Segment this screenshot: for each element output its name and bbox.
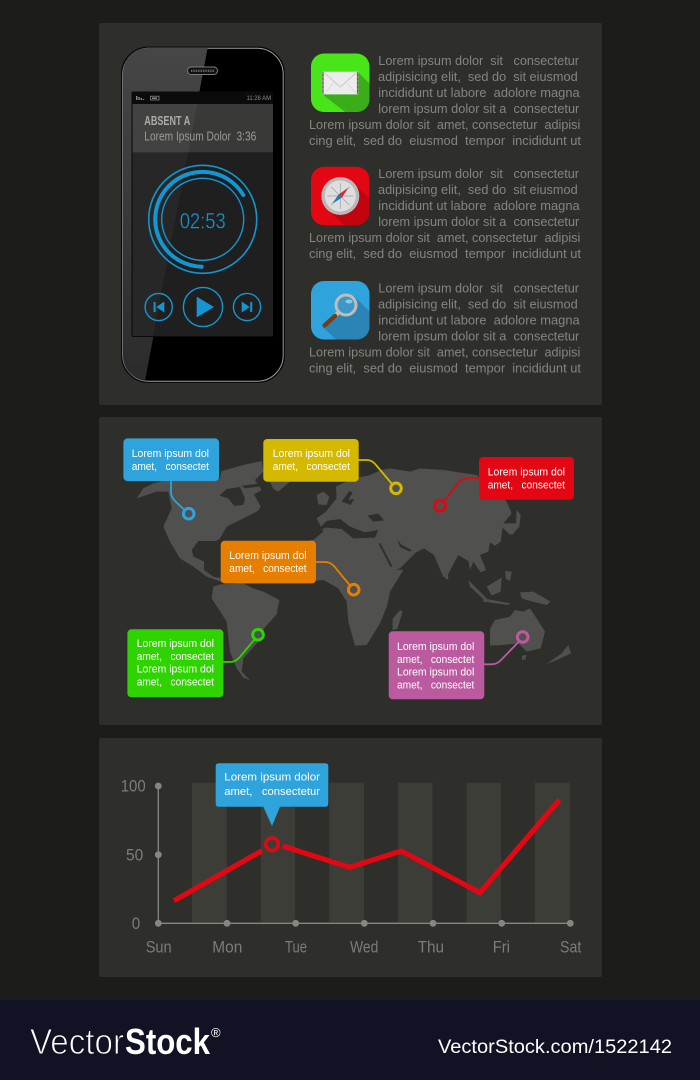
- text block: compass: cing elit, sed do eiusmod tempor incididunt ut: [309, 247, 582, 261]
- phone screen: [132, 92, 273, 337]
- callout: yellow marker: amet, consectet: [273, 461, 350, 473]
- callout: green marker: Lorem ipsum dol: [137, 638, 214, 650]
- image id url: VectorStock.com/1522142: [438, 1036, 672, 1058]
- chart axes: [155, 783, 574, 927]
- track header: [133, 104, 273, 152]
- text block: mail: Lorem ipsum dolor sit consectetur: [378, 54, 579, 68]
- text block: search: [309, 281, 582, 375]
- text block: search: Lorem ipsum dolor sit amet, consectetur adipisi: [309, 345, 580, 359]
- timer dial: [149, 165, 257, 273]
- callout: red marker: amet, consectet: [488, 480, 565, 492]
- VectorStock logo: ®: [211, 1025, 221, 1040]
- track header: Lorem Ipsum Dolor 3:36: [144, 130, 256, 144]
- callout: purple marker: amet, consectet: [397, 654, 474, 666]
- callout: orange marker: [221, 541, 359, 595]
- callout: green marker: amet, consectet: [137, 676, 214, 688]
- VectorStock logo: Stock: [125, 1021, 211, 1062]
- x axis day labels: Fri: [493, 939, 510, 957]
- text block: compass: incididunt ut labore adolore magna: [378, 199, 580, 213]
- red data line: [174, 800, 559, 901]
- chart background bars: [192, 783, 570, 922]
- text block: compass: adipisicing elit, sed do sit eiusmod: [378, 183, 578, 197]
- callout: green marker: Lorem ipsum dol: [137, 664, 214, 676]
- text block: compass: Lorem ipsum dolor sit amet, consectetur adipisi: [309, 231, 580, 245]
- text block: search: incididunt ut labore adolore magna: [378, 313, 580, 327]
- x axis day labels: Wed: [350, 939, 378, 957]
- x axis day labels: Mon: [212, 939, 242, 957]
- watermark footer band: [0, 1000, 700, 1080]
- text block: search: lorem ipsum dolor sit a consectetur: [378, 329, 579, 343]
- status bar: 11:28 AM: [246, 95, 271, 102]
- x axis day labels: Sat: [560, 939, 582, 957]
- callout: green marker: [127, 629, 263, 697]
- x axis day labels: Thu: [418, 939, 444, 957]
- text block: mail: cing elit, sed do eiusmod tempor incididunt ut: [309, 134, 582, 148]
- y axis labels: 50: [126, 845, 143, 864]
- chart tooltip: Lorem ipsum dolor: [224, 772, 320, 784]
- callout: orange marker: Lorem ipsum dol: [229, 550, 307, 562]
- callout: red marker: Lorem ipsum dol: [488, 466, 565, 478]
- status bar: [136, 95, 271, 102]
- phone mockup: [120, 46, 284, 382]
- callout: yellow marker: Lorem ipsum dol: [273, 448, 350, 460]
- callout: orange marker: amet, consectet: [229, 563, 307, 575]
- icon: play button: [183, 287, 223, 327]
- chart tooltip: [216, 763, 328, 826]
- callout: blue marker: [123, 438, 219, 519]
- callout: purple marker: [389, 631, 528, 699]
- text block: mail: [309, 54, 582, 148]
- americas and greenland: [137, 461, 290, 680]
- chart tooltip: amet, consectetur: [224, 786, 320, 798]
- text block: mail: incididunt ut labore adolore magna: [378, 86, 580, 100]
- icon: phone speaker: [188, 67, 218, 74]
- callout: purple marker: Lorem ipsum dol: [397, 641, 474, 653]
- icon: green mail app: [311, 54, 370, 112]
- text block: compass: lorem ipsum dolor sit a consectetur: [378, 215, 579, 229]
- callout: yellow marker: [263, 439, 401, 494]
- callout: purple marker: amet, consectet: [397, 680, 474, 692]
- x axis day labels: [146, 939, 582, 957]
- x axis day labels: Tue: [285, 939, 307, 957]
- y axis labels: [121, 777, 146, 933]
- text block: mail: Lorem ipsum dolor sit amet, consectetur adipisi: [309, 118, 580, 132]
- text block: mail: lorem ipsum dolor sit a consectetur: [378, 102, 579, 116]
- text block: search: Lorem ipsum dolor sit consectetur: [378, 281, 579, 295]
- callout: green marker: amet, consectet: [137, 651, 214, 663]
- callout: blue marker: amet, consectet: [132, 461, 209, 473]
- text block: compass: [309, 167, 582, 261]
- x axis day labels: Sun: [146, 939, 172, 957]
- callout: blue marker: Lorem ipsum dol: [132, 448, 209, 460]
- VectorStock logo: Vector: [30, 1021, 124, 1062]
- track header: ABSENT A: [144, 114, 190, 128]
- panel: line chart: [99, 738, 602, 977]
- icon: next button: [233, 293, 261, 321]
- panel: world map: [99, 417, 602, 725]
- text block: compass: Lorem ipsum dolor sit consectetur: [378, 167, 579, 181]
- icon: previous button: [145, 293, 172, 321]
- callout: red marker: [435, 457, 574, 511]
- callout: purple marker: Lorem ipsum dol: [397, 666, 474, 678]
- icon: blue search app: [311, 281, 370, 340]
- text block: mail: adipisicing elit, sed do sit eiusmod: [378, 70, 578, 84]
- world map silhouette: [137, 461, 571, 680]
- y axis labels: 100: [121, 777, 146, 796]
- y axis labels: 0: [132, 914, 140, 933]
- timer dial: 02:53: [180, 208, 226, 233]
- text block: search: cing elit, sed do eiusmod tempor incididunt ut: [309, 361, 582, 375]
- icon: red compass app: [311, 166, 370, 226]
- eurasia, africa and oceania: [310, 468, 571, 664]
- text block: search: adipisicing elit, sed do sit eiusmod: [378, 297, 578, 311]
- VectorStock logo: [30, 1021, 221, 1062]
